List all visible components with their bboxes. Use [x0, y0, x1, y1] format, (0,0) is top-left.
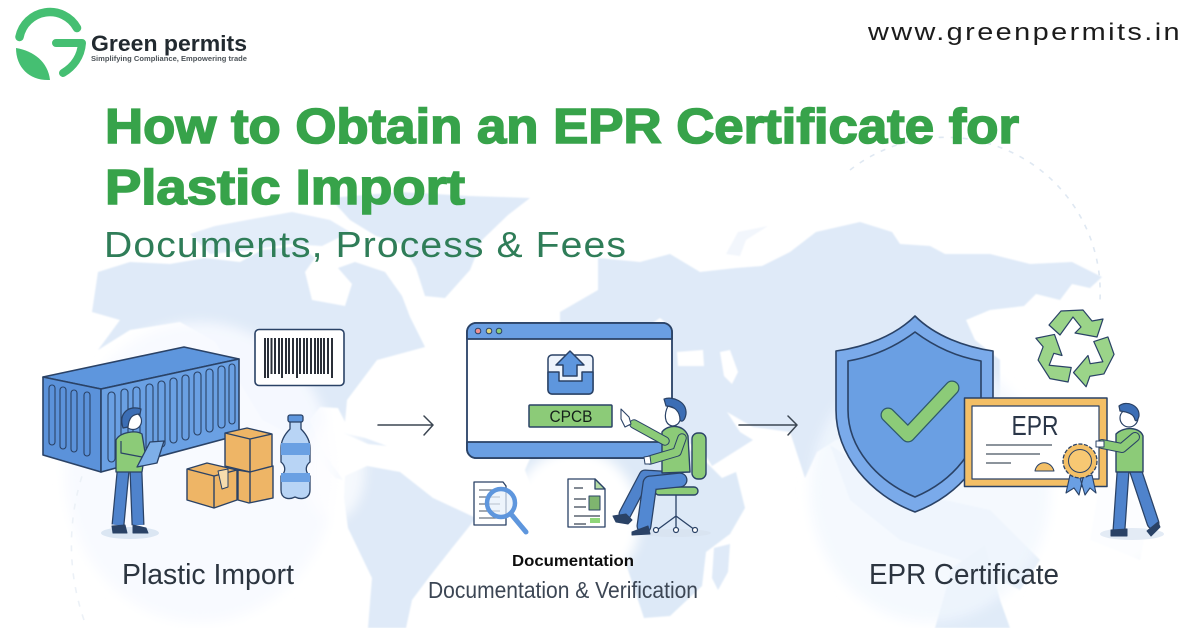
icon: barcode label — [255, 330, 344, 386]
label: EPR certificate: EPR Certificate — [869, 559, 1059, 591]
title — [105, 100, 1019, 215]
label: plastic import: Plastic Import — [122, 559, 294, 591]
title line 1: How to Obtain an EPR Certificate for — [105, 100, 1019, 154]
icon: document with magnifier — [474, 482, 526, 532]
icon: cardboard boxes — [187, 428, 273, 508]
logo name: Green permits — [91, 31, 247, 56]
label: documentation: Documentation — [512, 553, 634, 570]
illustration: EPR certificate — [836, 310, 1164, 540]
logo mark — [16, 12, 82, 80]
icon: worker with tablet — [101, 408, 164, 539]
icon: browser window — [467, 323, 672, 458]
icon: framed EPR certificate — [964, 398, 1107, 495]
CPCB button — [529, 405, 612, 427]
icon: plastic bottle — [281, 415, 310, 499]
world map background — [92, 192, 1150, 628]
illustration: plastic import — [43, 330, 344, 539]
icon: shipping container — [43, 347, 239, 472]
CPCB button: CPCB — [550, 407, 592, 426]
subtitle: Documents, Process & Fees — [104, 224, 627, 265]
icon: report document — [568, 479, 605, 527]
arrow: documentation to certificate — [739, 416, 797, 435]
icon: worker holding certificate — [1096, 403, 1164, 540]
title line 2: Plastic Import — [105, 161, 465, 215]
icon: framed EPR certificate: EPR — [1012, 410, 1058, 441]
logo tagline: Simplifying Compliance, Empowering trade — [91, 54, 247, 63]
arrow: import to documentation — [378, 416, 433, 435]
icon: seated worker on chair — [613, 398, 711, 537]
icon: upload tray — [548, 351, 593, 394]
icon: recycle symbol — [1028, 310, 1121, 391]
icon: security shield with check — [836, 316, 993, 512]
soft white haloes behind illustrations — [65, 310, 1190, 622]
logo — [16, 12, 247, 80]
label: documentation and verification: Documentation & Verification — [428, 577, 698, 603]
illustration: documentation and verification — [467, 323, 711, 537]
website url: www.greenpermits.in — [867, 19, 1182, 46]
